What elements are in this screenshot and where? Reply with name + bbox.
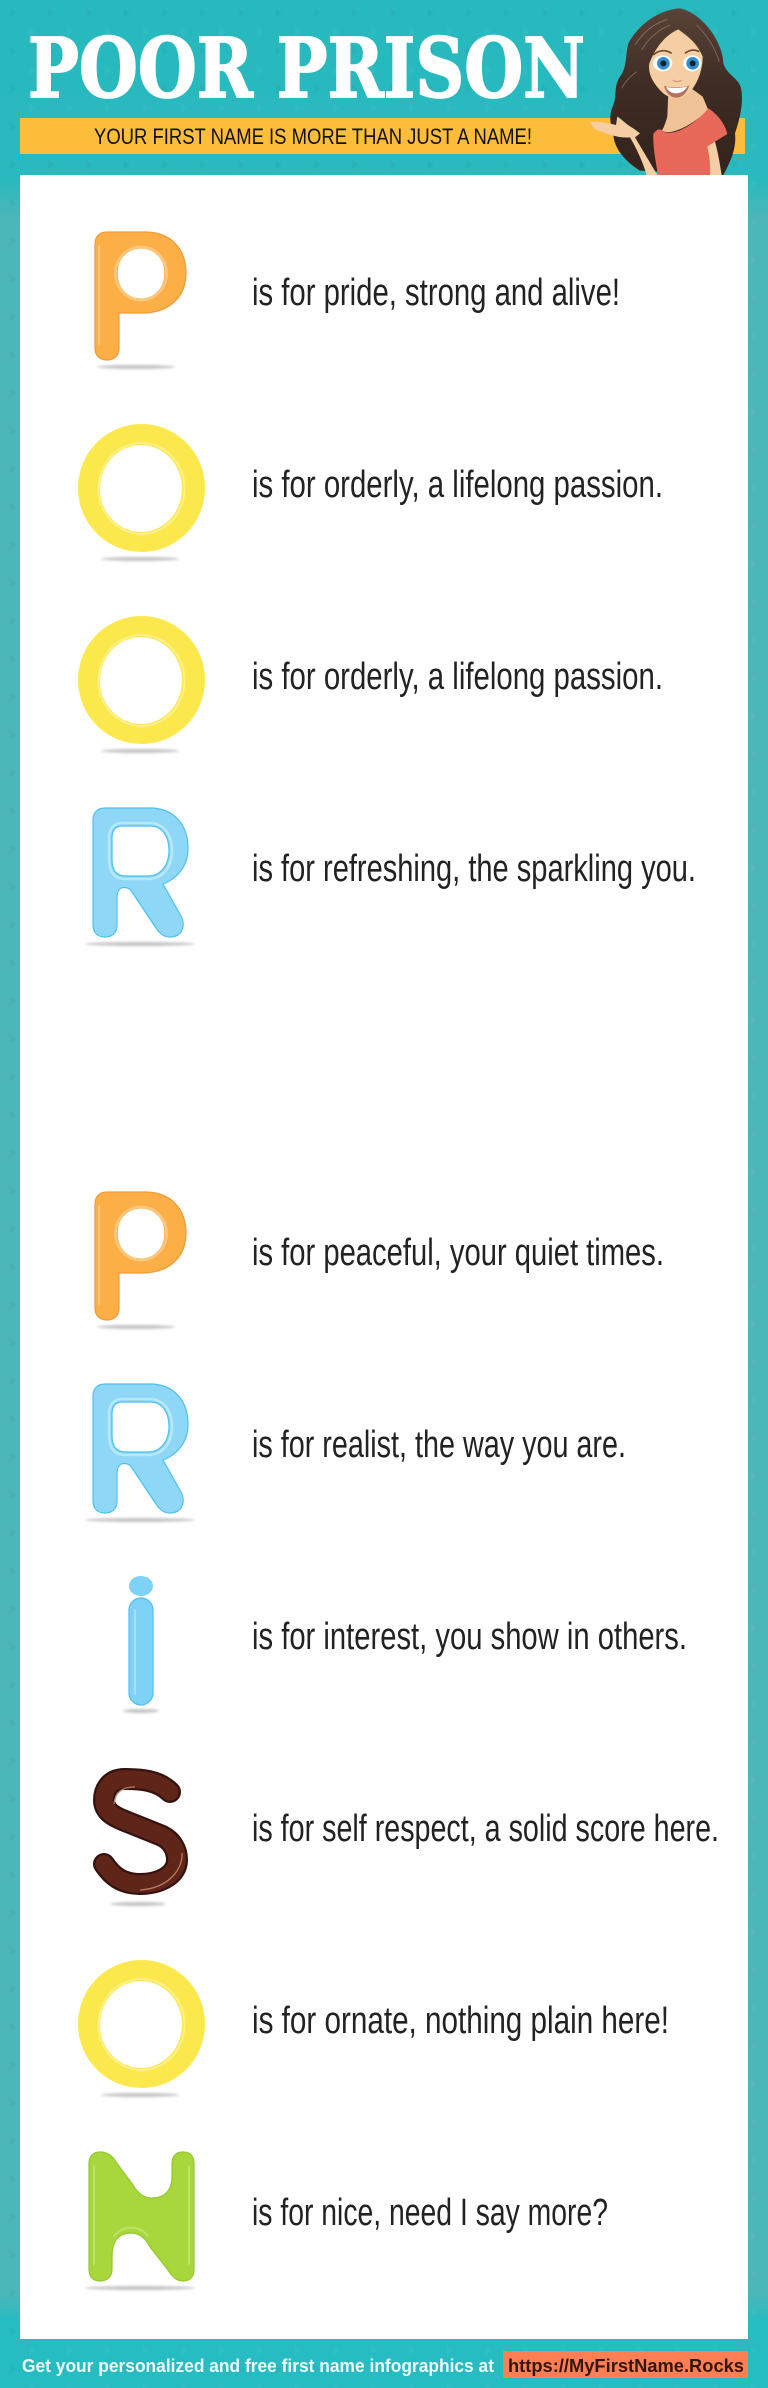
row 3 letter O — [78, 616, 205, 753]
illustration: woman presenting — [590, 8, 742, 177]
row 7 letter i — [123, 1576, 159, 1713]
row 10 text: is for nice, need I say more? — [252, 2192, 608, 2234]
footer url badge — [503, 2351, 748, 2378]
footer call to action: Get your personalized and free first name infographics at — [22, 2356, 494, 2376]
url text: https://MyFirstName.Rocks — [508, 2356, 744, 2376]
row 1 text: is for pride, strong and alive! — [252, 272, 620, 314]
row 9 letter O — [78, 1960, 205, 2097]
row 3 text: is for orderly, a lifelong passion. — [252, 656, 663, 698]
row 5 letter P — [95, 1192, 186, 1329]
row 2 letter O — [78, 424, 205, 561]
row 6 text: is for realist, the way you are. — [252, 1424, 626, 1466]
row 6 letter R — [85, 1384, 195, 1522]
row 10 letter N — [85, 2152, 195, 2290]
row 1 letter P — [95, 232, 186, 369]
title: POOR PRISON — [28, 21, 585, 117]
subtitle text: YOUR FIRST NAME IS MORE THAN JUST A NAME! — [94, 124, 532, 149]
subtitle banner — [20, 118, 745, 154]
row 8 letter S — [104, 1779, 182, 1906]
row 2 text: is for orderly, a lifelong passion. — [252, 464, 663, 506]
row 4 letter R — [85, 808, 195, 946]
